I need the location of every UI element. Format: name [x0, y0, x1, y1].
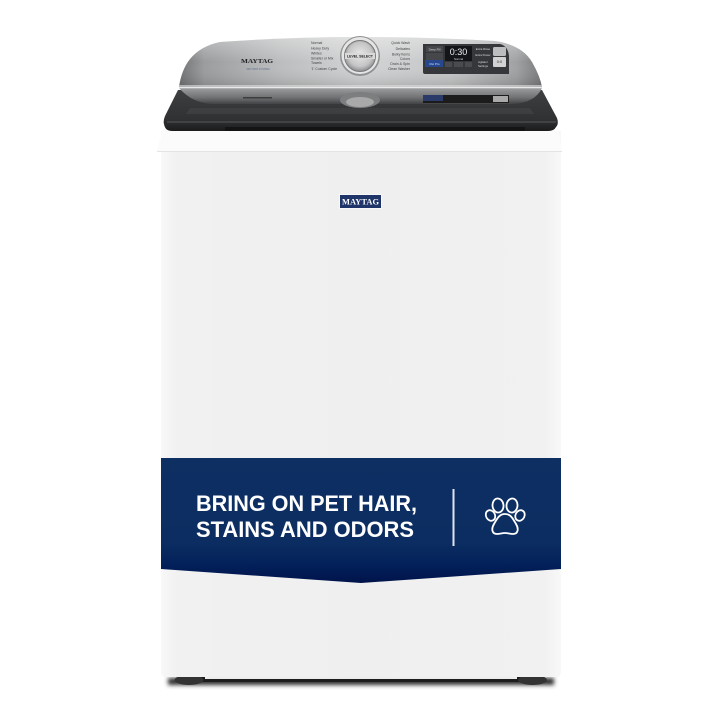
icon: paw print — [484, 498, 527, 534]
right cycle labels: Clean Washer — [388, 67, 411, 71]
banner headline: STAINS AND ODORS — [196, 517, 414, 542]
left cycle labels: '1' Custom Cycle — [311, 67, 337, 71]
panel buttons left: Deep Fill — [429, 48, 441, 52]
left cycle labels: Towels — [311, 61, 322, 65]
panel buttons right: Extra Rinse — [476, 47, 491, 51]
panel buttons right: Extra Power — [475, 53, 491, 57]
floor shadow — [168, 677, 554, 685]
banner divider — [452, 489, 454, 546]
time display: Normal — [454, 57, 463, 61]
lid reflection of console — [179, 88, 542, 108]
black glass lid — [164, 90, 558, 131]
banner headline: BRING ON PET HAIR, — [196, 491, 417, 516]
right cycle labels: Drain & Spin — [390, 62, 410, 66]
front badge: MAYTAG — [339, 194, 382, 209]
power and start buttons: 0:0 — [497, 59, 503, 64]
panel buttons right: Settings — [478, 64, 489, 68]
feet — [174, 675, 547, 685]
front badge: MAYTAG: MAYTAG — [342, 196, 379, 206]
panel buttons right: Agitator — [478, 60, 488, 64]
time display: 0:30 — [450, 47, 467, 57]
right cycle labels: Colors — [400, 57, 410, 61]
panel buttons left — [425, 46, 443, 67]
left cycle labels: Normal — [311, 41, 323, 45]
right cycle labels: Bulky Items — [392, 52, 410, 56]
left cycle labels — [311, 41, 337, 71]
left cycle labels: Heavy Duty — [311, 46, 329, 50]
console tagline: PET PRO SYSTEM — [247, 67, 269, 71]
right cycle labels: Quick Wash — [391, 41, 410, 45]
console brand logo: MAYTAG — [241, 58, 273, 65]
left cycle labels: Whites — [311, 52, 322, 56]
right cycle labels: Delicates — [396, 47, 410, 51]
cycle selector knob: LEVEL SELECT — [347, 54, 374, 58]
display panel — [423, 44, 509, 74]
left cycle labels: Smaller or Mix — [311, 56, 334, 60]
time display — [445, 46, 472, 61]
panel buttons right — [475, 47, 491, 68]
banner — [161, 458, 561, 583]
right cycle labels — [388, 41, 411, 71]
panel buttons left: Pet Pro — [429, 62, 440, 66]
silver control console — [179, 37, 542, 88]
panel buttons lower — [445, 62, 472, 67]
cycle selector knob — [340, 36, 380, 76]
washer cabinet — [157, 129, 562, 679]
